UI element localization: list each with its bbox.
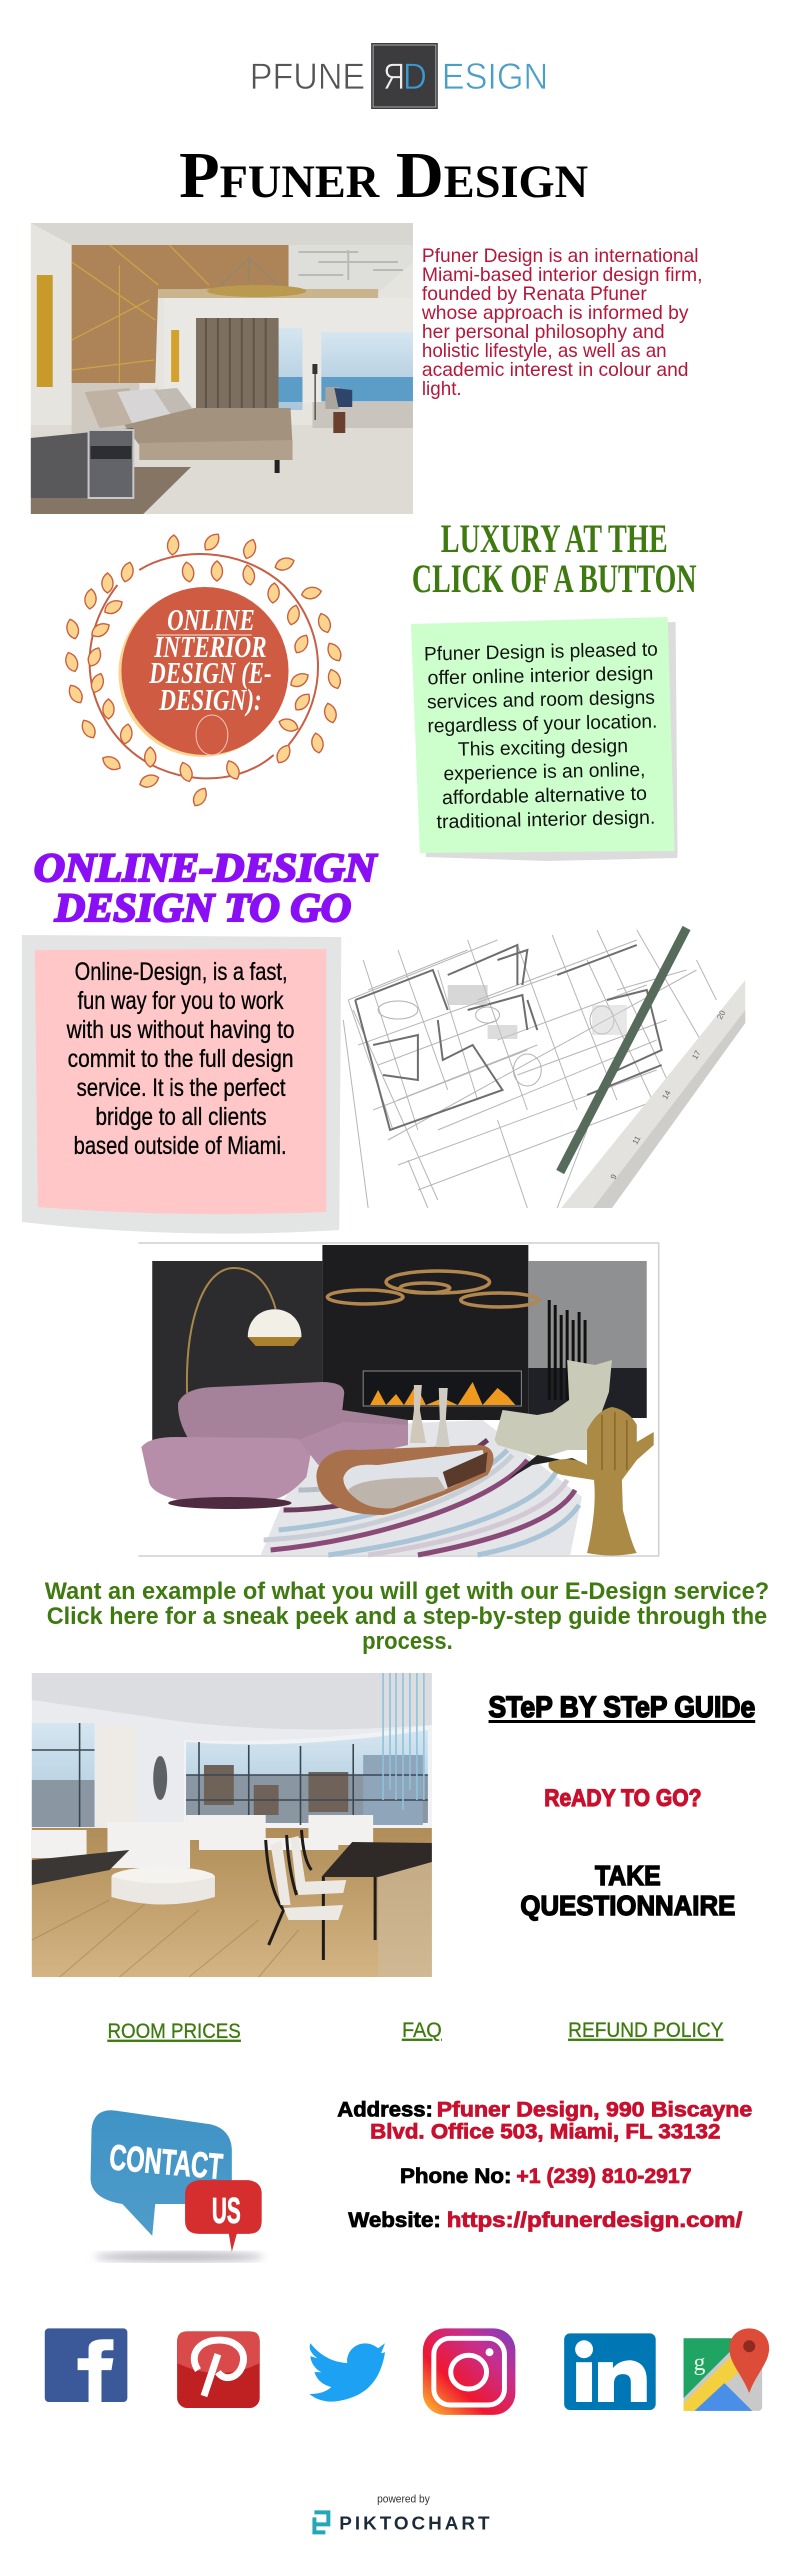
contact details: Blvd. Office 503, Miami, FL 33132 <box>370 2120 720 2143</box>
panel: green note: affordable alternative to <box>442 783 647 809</box>
image: mood board living room <box>138 1243 659 1556</box>
logo: Pfuner Design: PFUNE <box>250 56 365 97</box>
heading: online-design design to go: ONLINE-DESIGN <box>34 845 377 890</box>
panel: pink note: based outside of Miami. <box>74 1132 287 1160</box>
icon: google maps <box>684 2328 769 2411</box>
link: take questionnaire <box>520 1860 735 1921</box>
intro text: academic interest in colour and <box>422 360 689 381</box>
panel: pink note: fun way for you to work <box>78 987 284 1015</box>
contact details <box>337 2098 752 2232</box>
heading: luxury at the click of a button: LUXURY AT THE <box>441 516 668 561</box>
link: ready to go: ReADY TO GO? <box>544 1785 701 1812</box>
image: blueprint with pencil and ruler: 11 <box>631 1134 643 1146</box>
image: blueprint with pencil and ruler: 17 <box>690 1048 703 1061</box>
contact details: Pfuner Design, 990 Biscayne <box>437 2098 752 2121</box>
panel: green note: Pfuner Design is pleased to <box>424 639 658 665</box>
link: faq: FAQ <box>402 2019 442 2042</box>
panel: green note: regardless of your location. <box>427 711 658 737</box>
icon: instagram <box>423 2328 515 2415</box>
photo: bedroom <box>31 223 413 514</box>
footer: powered by piktochart <box>314 2493 490 2534</box>
panel: green note: offer online interior design <box>427 663 654 689</box>
image: blueprint with pencil and ruler: 9 <box>609 1172 619 1181</box>
intro text: holistic lifestyle, as well as an <box>422 341 667 362</box>
panel: pink note: with us without having to <box>66 1016 295 1044</box>
contact details: Website: <box>348 2209 441 2232</box>
link: step by step guide: STeP BY STeP GUIDe <box>489 1691 755 1724</box>
intro text: whose approach is informed by <box>421 303 689 324</box>
link: room prices: ROOM PRICES <box>107 2020 241 2043</box>
panel: green note: services and room designs <box>427 687 655 713</box>
panel: pink note: commit to the full design <box>68 1045 294 1073</box>
call to action text: Want an example of what you will get with our E-Design service? <box>45 1578 769 1605</box>
call to action text <box>45 1578 769 1655</box>
intro text <box>421 246 702 400</box>
panel: green note: experience is an online, <box>443 759 646 785</box>
footer: powered by piktochart: powered by <box>377 2493 430 2505</box>
intro text: founded by Renata Pfuner <box>422 284 647 305</box>
link: take questionnaire: QUESTIONNAIRE <box>520 1890 735 1921</box>
icon: contact us speech bubbles <box>91 2110 264 2262</box>
wreath badge: online interior design <box>63 531 344 808</box>
wreath badge: online interior design: INTERIOR <box>153 629 267 664</box>
icon: linkedin <box>564 2333 656 2410</box>
contact details: https://pfunerdesign.com/ <box>447 2209 742 2232</box>
heading: online-design design to go <box>34 845 377 930</box>
contact details: Address: <box>337 2098 433 2121</box>
footer: powered by piktochart: PIKTOCHART <box>339 2513 490 2534</box>
logo: Pfuner Design: D <box>403 56 427 97</box>
intro text: Miami-based interior design firm, <box>422 265 702 286</box>
logo: Pfuner Design: R <box>383 56 405 97</box>
icon: facebook <box>45 2328 127 2402</box>
image: blueprint with pencil and ruler: 14 <box>660 1088 673 1101</box>
intro text: Pfuner Design is an international <box>422 246 698 267</box>
icon: twitter <box>309 2343 385 2402</box>
panel: green note <box>411 617 678 861</box>
contact and footer section <box>45 2019 769 2534</box>
photo: bright living room <box>32 1673 432 1977</box>
panel: pink note: service. It is the perfect <box>77 1074 286 1102</box>
icon: contact us speech bubbles: US <box>212 2191 241 2231</box>
panel: pink note: Online-Design, is a fast, <box>75 958 288 986</box>
intro text: her personal philosophy and <box>422 322 665 343</box>
panel: green note: This exciting design <box>458 735 628 761</box>
wreath badge: online interior design: DESIGN (E- <box>149 655 272 690</box>
panel: pink note: bridge to all clients <box>96 1103 267 1131</box>
title: Pfuner Design <box>179 139 588 212</box>
call to action text: Click here for a sneak peek and a step-by-step guide through the <box>47 1603 767 1630</box>
contact details: Phone No: <box>400 2165 511 2188</box>
intro text: light. <box>422 379 462 400</box>
image: blueprint with pencil and ruler <box>343 928 745 1208</box>
contact details: +1 (239) 810-2917 <box>516 2165 692 2188</box>
call to action text: process. <box>362 1628 453 1655</box>
logo: Pfuner Design: ESIGN <box>442 56 548 97</box>
panel: green note: traditional interior design. <box>436 807 656 833</box>
icon: contact us speech bubbles: CONTACT <box>108 2137 224 2187</box>
icon: google maps: g <box>694 2350 706 2376</box>
wreath badge: online interior design: DESIGN): <box>158 682 262 717</box>
heading: luxury at the click of a button <box>412 516 697 601</box>
panel: pink note <box>22 935 341 1234</box>
wreath badge: online interior design: ONLINE <box>167 602 255 637</box>
link: refund policy: REFUND POLICY <box>568 2019 723 2042</box>
link: take questionnaire: TAKE <box>595 1860 661 1891</box>
icon: pinterest <box>177 2331 260 2408</box>
heading: online-design design to go: DESIGN TO GO <box>54 885 351 930</box>
image: blueprint with pencil and ruler: 20 <box>715 1008 728 1021</box>
logo: Pfuner Design <box>250 43 548 109</box>
